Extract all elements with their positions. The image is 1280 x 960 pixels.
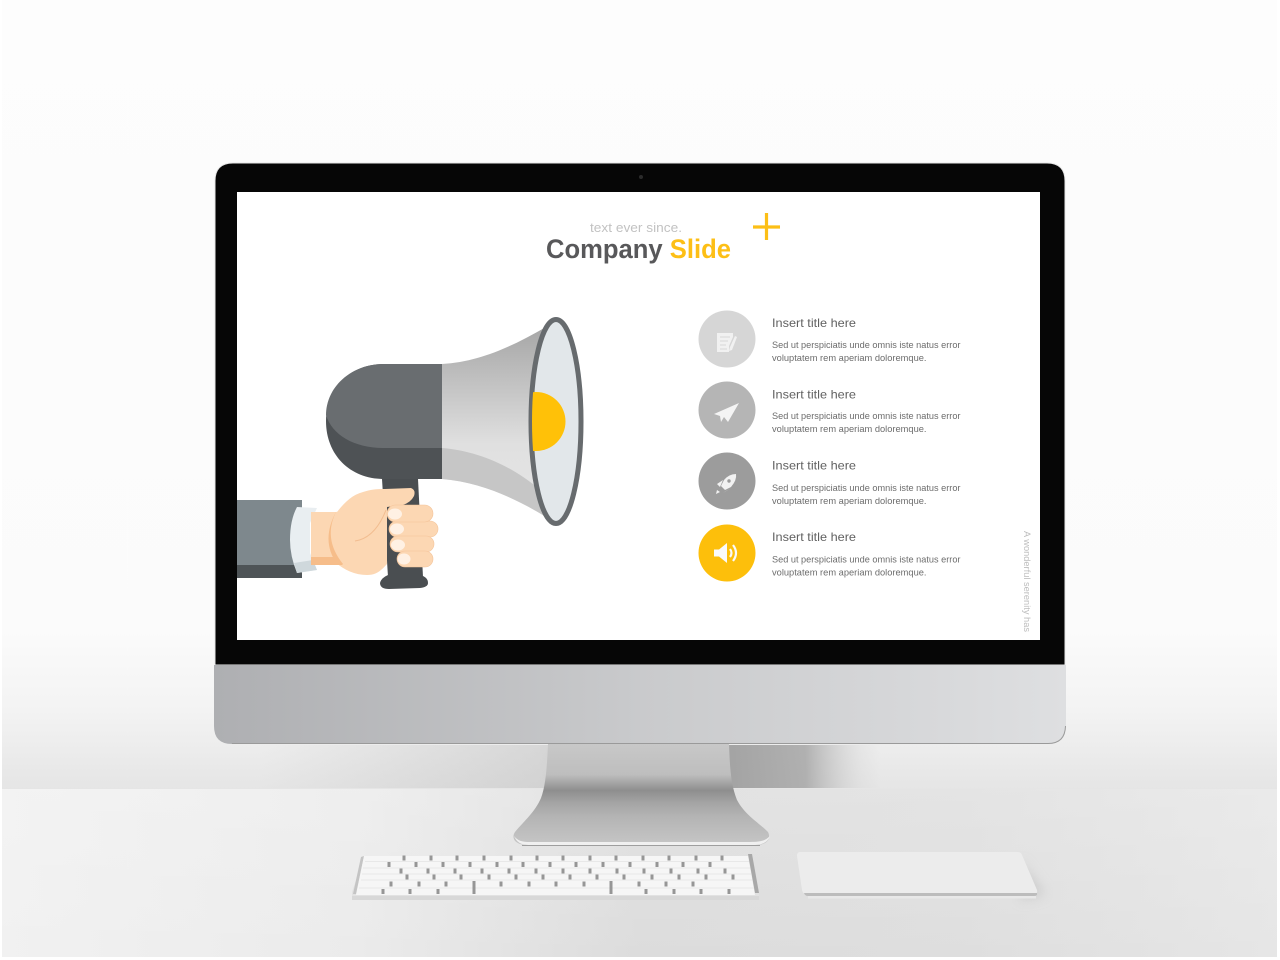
title: Company Slide — [546, 234, 731, 264]
item text: voluptatem rem aperiam doloremque. — [772, 353, 926, 364]
item text: voluptatem rem aperiam doloremque. — [772, 568, 926, 578]
keyboard — [352, 854, 759, 900]
item title: Insert title here — [772, 388, 856, 402]
slide heading — [546, 213, 780, 264]
trackpad — [797, 852, 1046, 900]
list item 4 — [698, 524, 960, 582]
circle icon: rocket — [698, 452, 756, 510]
list item 3 — [698, 452, 960, 510]
item text — [772, 340, 960, 364]
fingernails — [388, 508, 410, 564]
item text: Sed ut perspiciatis unde omnis iste natus error — [772, 411, 960, 422]
circle icon: document — [698, 310, 756, 368]
item text — [772, 554, 960, 578]
plus mark — [753, 213, 780, 240]
monitor chin — [214, 665, 1066, 744]
circle icon: paper plane — [698, 382, 756, 438]
item title: Insert title here — [772, 530, 856, 544]
item title: Insert title here — [772, 316, 856, 330]
megaphone horn — [442, 327, 546, 517]
fingers — [387, 505, 438, 567]
illustration: hand holding megaphone — [237, 320, 581, 589]
vertical side caption: A wonderful serenity has — [1021, 531, 1032, 632]
item text: voluptatem rem aperiam doloremque. — [772, 424, 926, 435]
item text: Sed ut perspiciatis unde omnis iste natus error — [772, 483, 960, 494]
suit sleeve — [237, 500, 302, 578]
megaphone handle — [380, 479, 428, 589]
item text — [772, 483, 960, 507]
subtitle: text ever since. — [590, 220, 682, 235]
hand — [311, 488, 438, 575]
item text — [772, 411, 960, 435]
circle icon: speaker — [698, 524, 756, 582]
shirt cuff — [290, 507, 317, 573]
item text: voluptatem rem aperiam doloremque. — [772, 496, 926, 507]
slide screen — [237, 192, 1040, 640]
megaphone body — [326, 364, 442, 479]
monitor — [214, 163, 1066, 846]
list item 2 — [698, 382, 960, 438]
monitor stand — [513, 744, 770, 846]
monitor black bezel — [215, 163, 1065, 665]
megaphone rim — [528, 317, 584, 526]
camera dot — [639, 175, 643, 179]
keys — [356, 856, 755, 895]
item title: Insert title here — [772, 458, 856, 472]
key ticks — [383, 856, 733, 894]
item text: Sed ut perspiciatis unde omnis iste natus error — [772, 340, 960, 351]
item text: Sed ut perspiciatis unde omnis iste natus error — [772, 554, 960, 566]
key gaps — [359, 862, 754, 888]
list item 1 — [698, 310, 960, 368]
